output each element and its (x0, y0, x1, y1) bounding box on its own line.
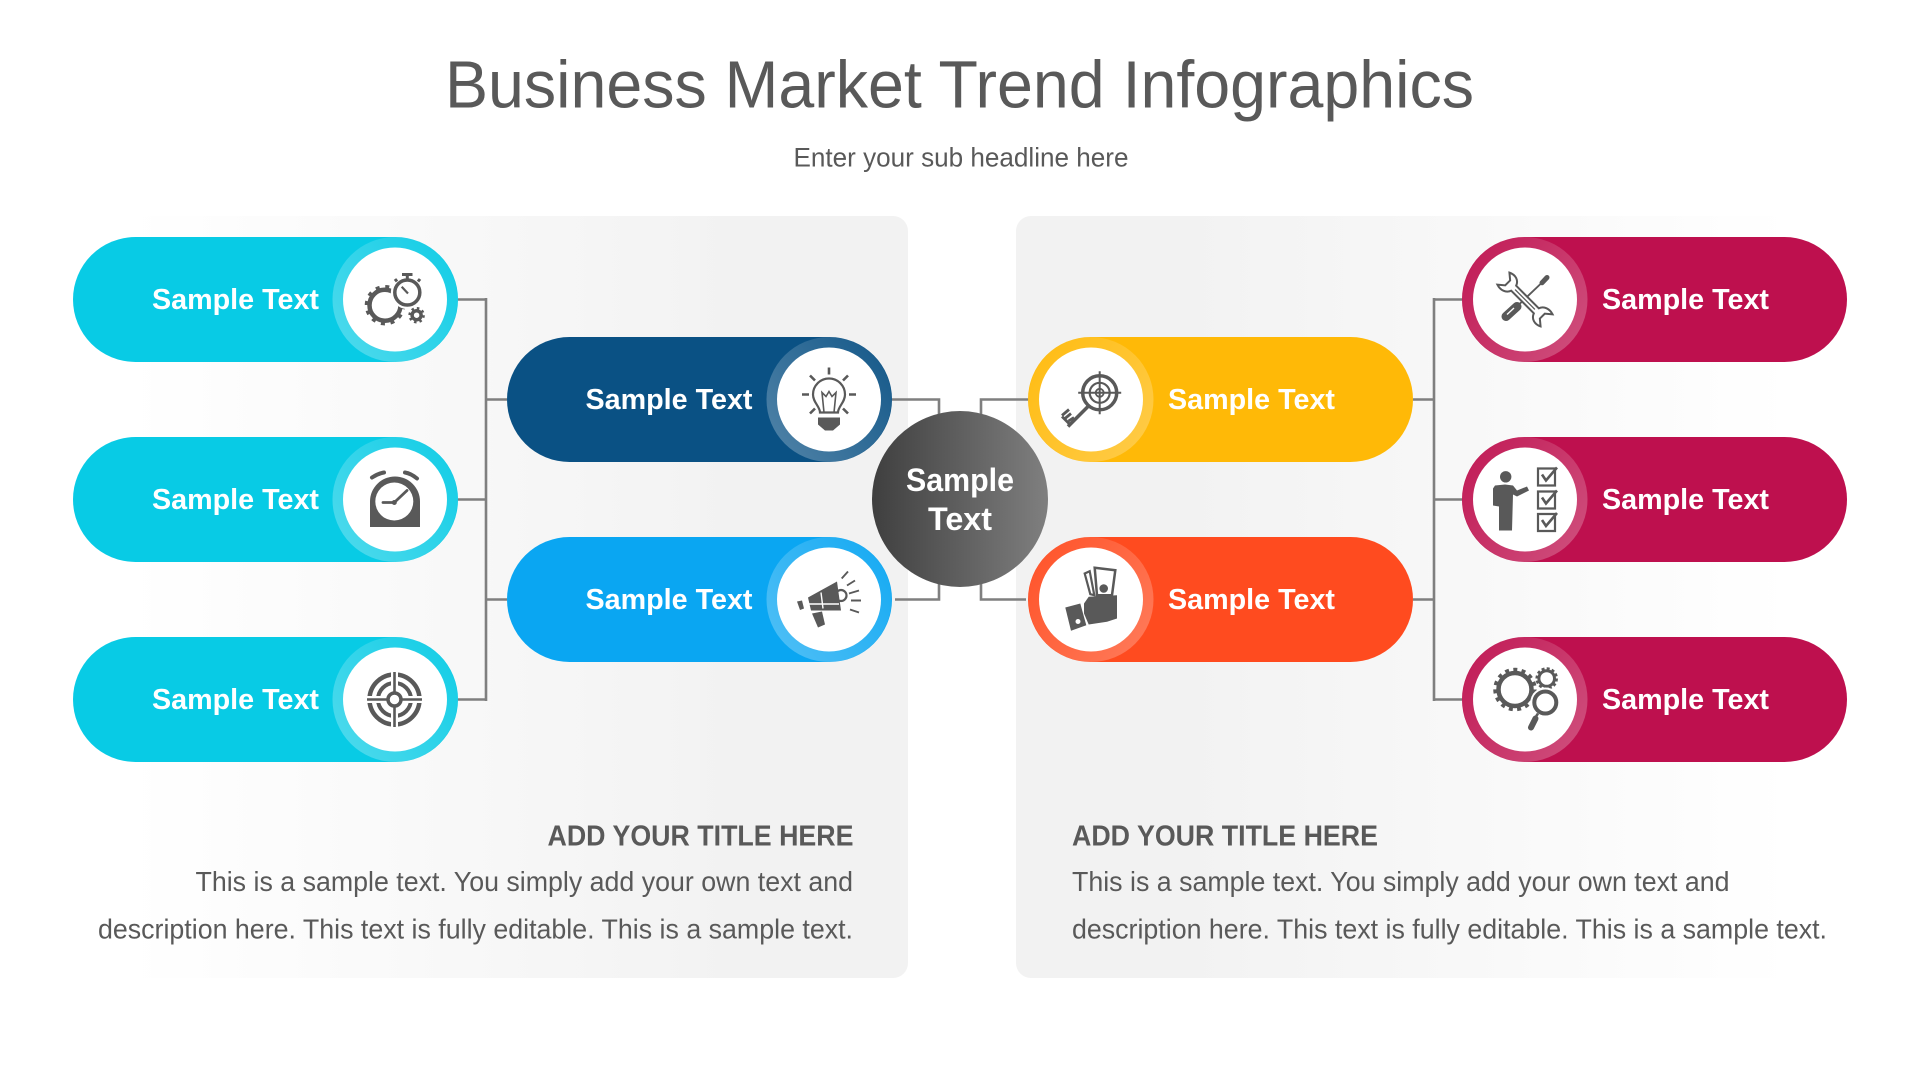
pill: right row 1: Sample Text (1602, 284, 1769, 316)
pill: left middle row 2: Sample Text (586, 584, 753, 616)
pill: right row 3 (1462, 637, 1847, 762)
pill: right row 1 (1462, 237, 1847, 362)
icon: hand holding money (1065, 568, 1117, 631)
text block: right: This is a sample text. You simply add your own text and (1072, 866, 1730, 897)
text block: right: description here. This text is fully editable. This is a sample text. (1072, 914, 1827, 944)
icon: alarm clock (370, 472, 420, 527)
pill: left row 1 (73, 237, 458, 362)
pill: right row 3: Sample Text (1602, 684, 1769, 716)
icon: wrench and screwdriver (1497, 271, 1553, 328)
icon: person with checklist (1493, 468, 1557, 531)
icon: megaphone (797, 572, 861, 628)
pill: left middle row 1 (507, 337, 892, 462)
icon: light bulb (802, 368, 856, 430)
icon: key with target (1062, 371, 1121, 426)
pill: right middle row 1: Sample Text (1168, 384, 1335, 416)
pill: right middle row 2: Sample Text (1168, 584, 1335, 616)
pill: left row 2: Sample Text (152, 484, 319, 516)
center circle node (872, 411, 1048, 587)
pill: left row 2 (73, 437, 458, 562)
title: Business Market Trend Infographics (445, 48, 1474, 122)
pill: right row 2 (1462, 437, 1847, 562)
pill: right middle row 2 (1028, 537, 1413, 662)
pill: right middle row 1 (1028, 337, 1413, 462)
text block: right: ADD YOUR TITLE HERE (1072, 820, 1378, 852)
pill: left middle row 2 (507, 537, 892, 662)
subtitle: Enter your sub headline here (794, 142, 1128, 172)
pill: left middle row 1: Sample Text (586, 384, 753, 416)
panel: left background (40, 216, 908, 978)
pill: left row 3 (73, 637, 458, 762)
panel: right background (1016, 216, 1880, 978)
text block: right (1072, 820, 1827, 944)
icon: target crosshair (366, 672, 422, 728)
text block: left: This is a sample text. You simply add your own text and (196, 866, 853, 897)
connector lines (458, 298, 1462, 701)
text block: left: ADD YOUR TITLE HERE (548, 820, 854, 852)
center circle node: Text (928, 501, 992, 537)
pill: left row 3: Sample Text (152, 684, 319, 716)
pill: right row 2: Sample Text (1602, 484, 1769, 516)
center circle node: Sample (906, 462, 1014, 498)
pill: left row 1: Sample Text (152, 284, 319, 316)
text block: left: description here. This text is fully editable. This is a sample text. (98, 914, 853, 944)
text block: left (98, 820, 854, 944)
icon: gears and stopwatch (366, 274, 426, 325)
icon: gears and magnifier (1495, 668, 1560, 728)
